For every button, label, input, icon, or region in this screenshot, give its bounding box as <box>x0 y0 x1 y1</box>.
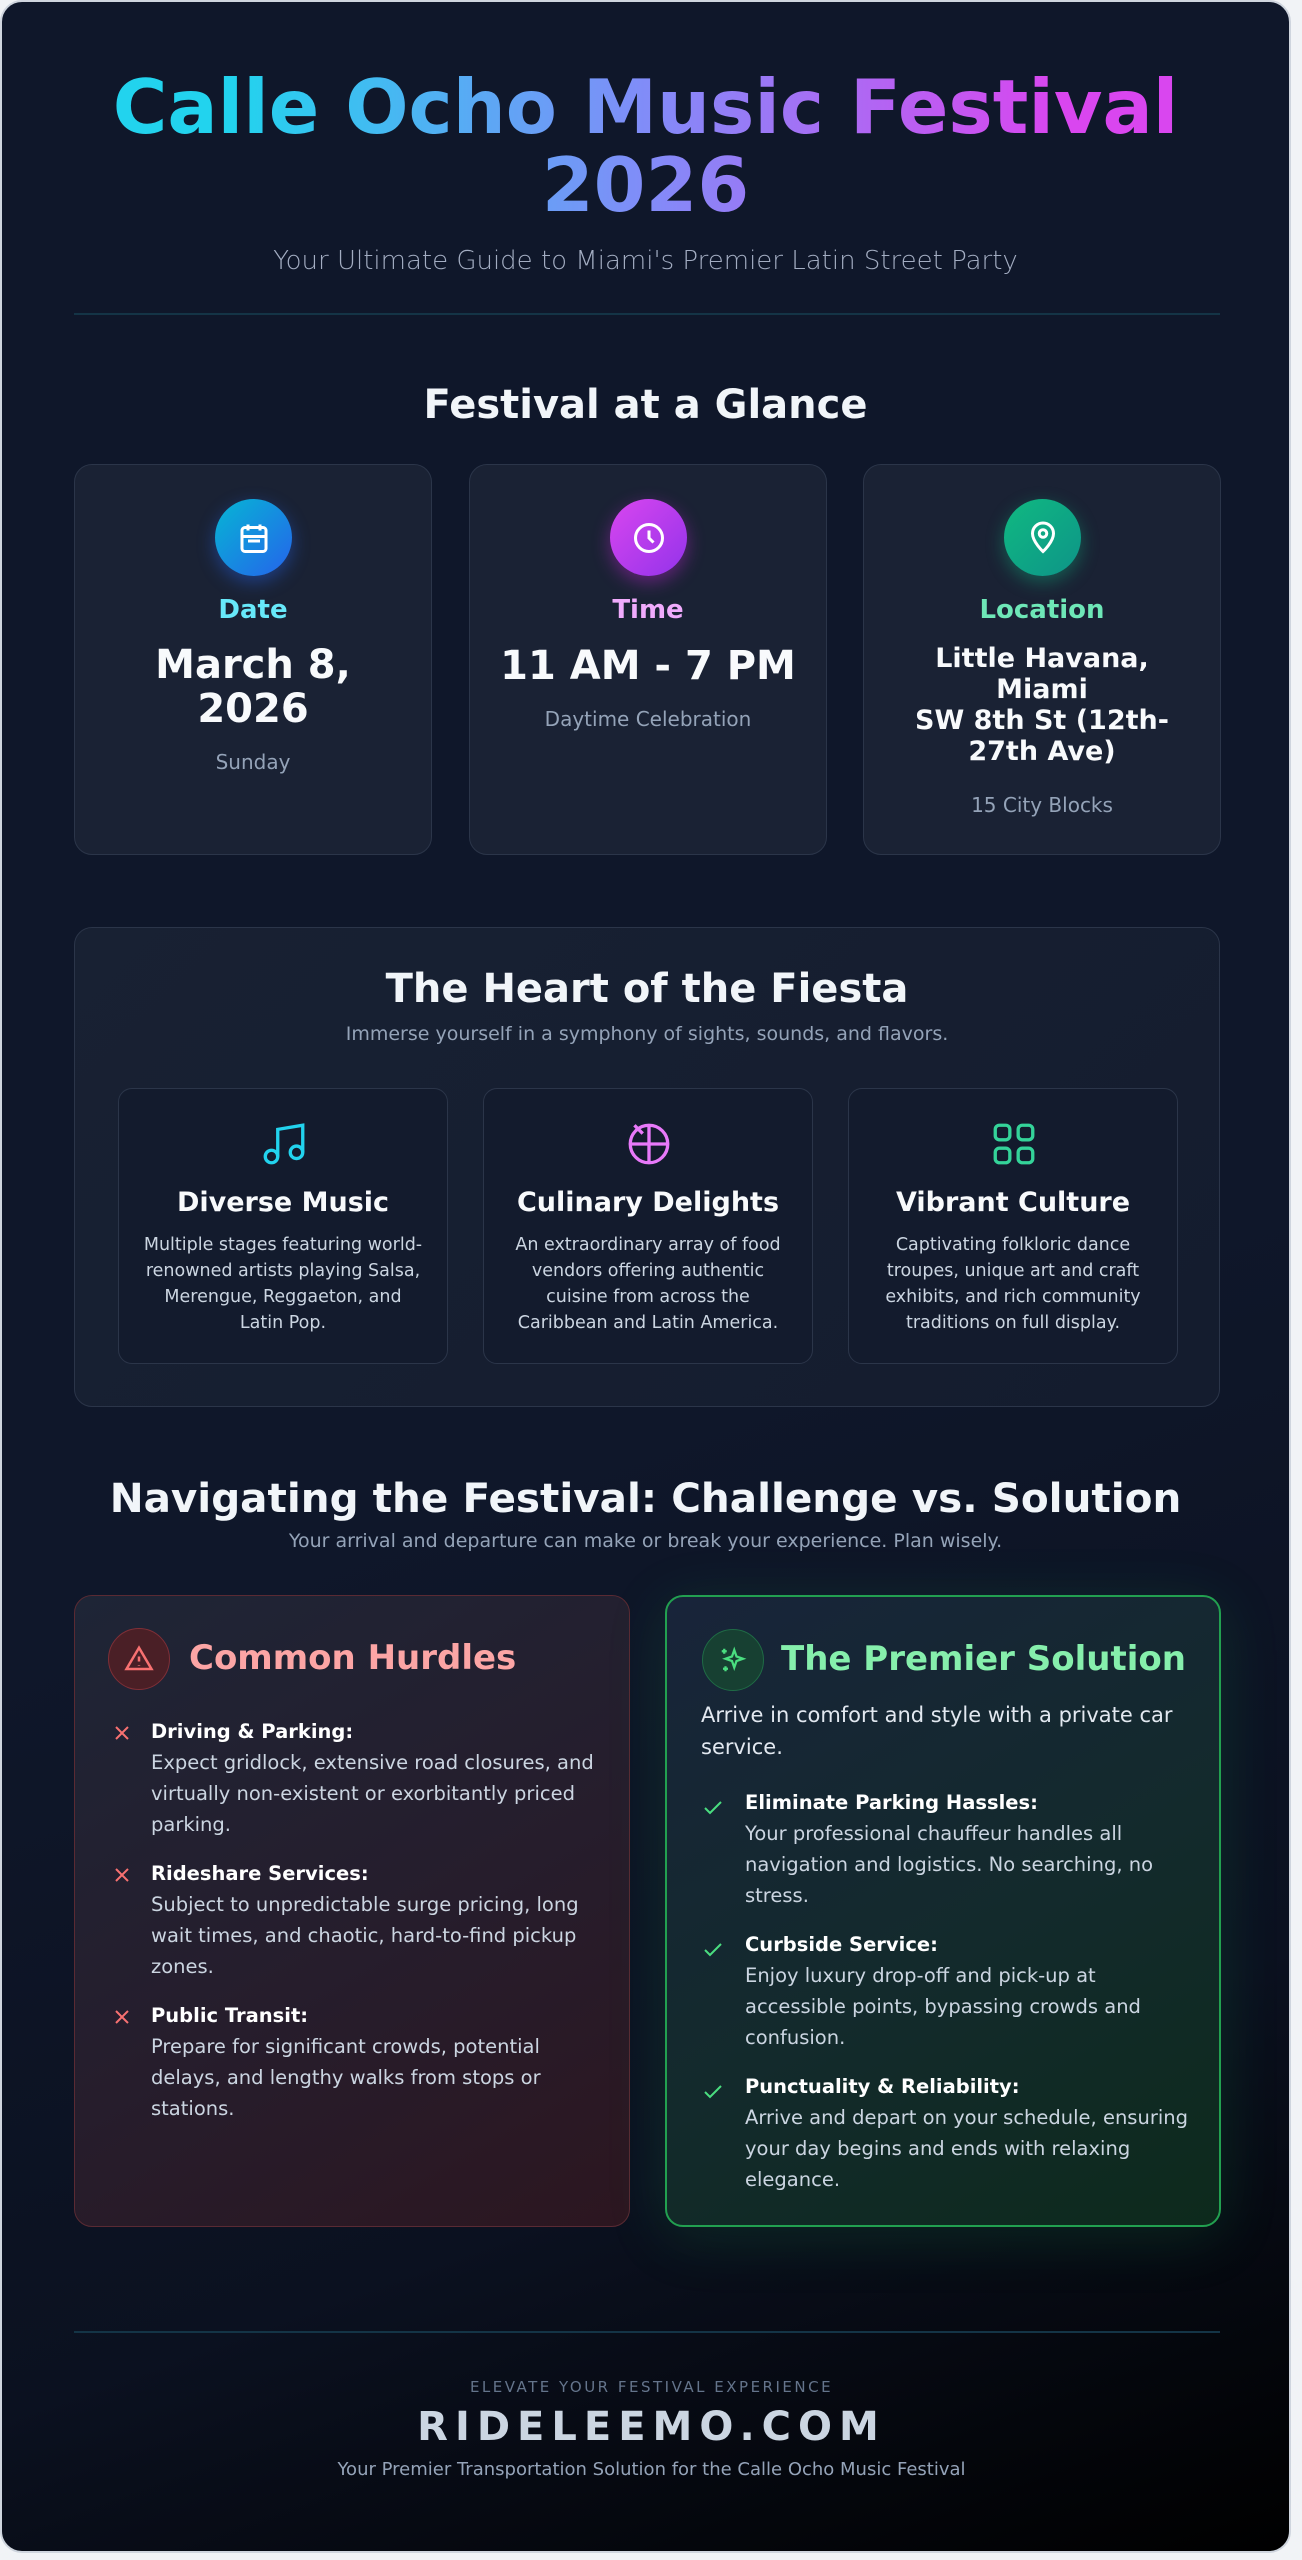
panel: premier solution: Punctuality & Reliability: <box>745 2075 1020 2098</box>
subtitle: Your Ultimate Guide to Miami's Premier Latin Street Party <box>273 246 1018 276</box>
panel: common hurdles <box>74 1595 630 2227</box>
card: diverse music: Multiple stages featuring world-renowned artists playing Salsa, Merengue, Reggaeton, and Latin Pop. <box>144 1235 422 1333</box>
icon: calendar <box>215 499 292 576</box>
card: date <box>74 464 432 855</box>
panel: common hurdles: Prepare for significant crowds, potential delays, and lengthy walks from stops or stations. <box>151 2035 541 2120</box>
panel: premier solution: Your professional chauffeur handles all navigation and logistics. No searching, no stress. <box>745 1822 1153 1907</box>
card: culinary delights <box>483 1088 813 1364</box>
title <box>2 69 1289 225</box>
text: Your arrival and departure can make or break your experience. Plan wisely. <box>289 1530 1002 1552</box>
card: vibrant culture: Captivating folkloric dance troupes, unique art and craft exhibits, and rich community traditions on full display. <box>885 1235 1141 1333</box>
card: date: Date <box>218 595 288 625</box>
footer: ELEVATE YOUR FESTIVAL EXPERIENCE <box>470 2378 833 2396</box>
card: culinary delights: Culinary Delights <box>517 1187 779 1218</box>
card: date: Sunday <box>216 750 290 774</box>
card: diverse music: Diverse Music <box>177 1187 389 1218</box>
footer: RIDELEEMO.COM <box>417 2404 886 2450</box>
panel: heart of the fiesta <box>74 927 1220 1407</box>
footer: Your Premier Transportation Solution for the Calle Ocho Music Festival <box>337 2459 966 2480</box>
card: time: Time <box>612 595 684 625</box>
panel: common hurdles: Driving & Parking: <box>151 1720 353 1743</box>
heading: festival at a glance: Festival at a Glance <box>424 382 867 428</box>
card: vibrant culture <box>848 1088 1178 1364</box>
card: vibrant culture: Vibrant Culture <box>896 1187 1130 1218</box>
card: location: Location <box>979 595 1105 625</box>
card: date: March 8, <box>155 642 351 688</box>
panel: common hurdles: Subject to unpredictable surge pricing, long wait times, and chaotic, hard-to-find pickup zones. <box>151 1893 579 1978</box>
icon: clock <box>610 499 687 576</box>
card: location: Little Havana, <box>935 643 1149 674</box>
card: time: 11 AM - 7 PM <box>500 643 796 689</box>
card: location: 27th Ave) <box>968 736 1116 767</box>
card: culinary delights: An extraordinary array of food vendors offering authentic cuisine from across the Caribbean and Latin America. <box>515 1235 781 1333</box>
panel: heart of the fiesta: Immerse yourself in a symphony of sights, sounds, and flavors. <box>346 1023 948 1045</box>
panel: premier solution: Curbside Service: <box>745 1933 938 1956</box>
footer <box>337 2378 966 2480</box>
title: Calle Ocho Music Festival <box>113 64 1178 151</box>
card: location: 15 City Blocks <box>971 793 1113 817</box>
panel: heart of the fiesta: The Heart of the Fiesta <box>386 966 908 1012</box>
card: location: Miami <box>996 674 1088 705</box>
panel: premier solution: The Premier Solution <box>781 1639 1186 1679</box>
panel: premier solution: Enjoy luxury drop-off and pick-up at accessible points, bypassing crowds and confusion. <box>745 1964 1141 2049</box>
panel: premier solution <box>665 1595 1221 2227</box>
panel: common hurdles: Public Transit: <box>151 2004 308 2027</box>
heading: navigating: Navigating the Festival: Challenge vs. Solution <box>110 1474 1181 1522</box>
panel: premier solution: Eliminate Parking Hassles: <box>745 1791 1038 1814</box>
panel: common hurdles: Expect gridlock, extensive road closures, and virtually non-existent or exorbitantly priced parking. <box>151 1751 594 1836</box>
card: time: Daytime Celebration <box>545 707 751 731</box>
icon: map pin <box>1004 499 1081 576</box>
panel: common hurdles: Rideshare Services: <box>151 1862 369 1885</box>
card: date: 2026 <box>197 686 309 732</box>
card: time <box>469 464 827 855</box>
panel: premier solution: Arrive and depart on your schedule, ensuring your day begins and ends with relaxing elegance. <box>745 2106 1188 2191</box>
panel: premier solution: Arrive in comfort and style with a private car service. <box>701 1703 1173 1759</box>
card: location: SW 8th St (12th- <box>915 705 1169 736</box>
card: location <box>863 464 1221 855</box>
panel: common hurdles: Common Hurdles <box>189 1638 516 1678</box>
title: 2026 <box>542 142 749 229</box>
icon: warning <box>108 1628 170 1690</box>
icon: sparkles <box>702 1629 764 1691</box>
card: diverse music <box>118 1088 448 1364</box>
